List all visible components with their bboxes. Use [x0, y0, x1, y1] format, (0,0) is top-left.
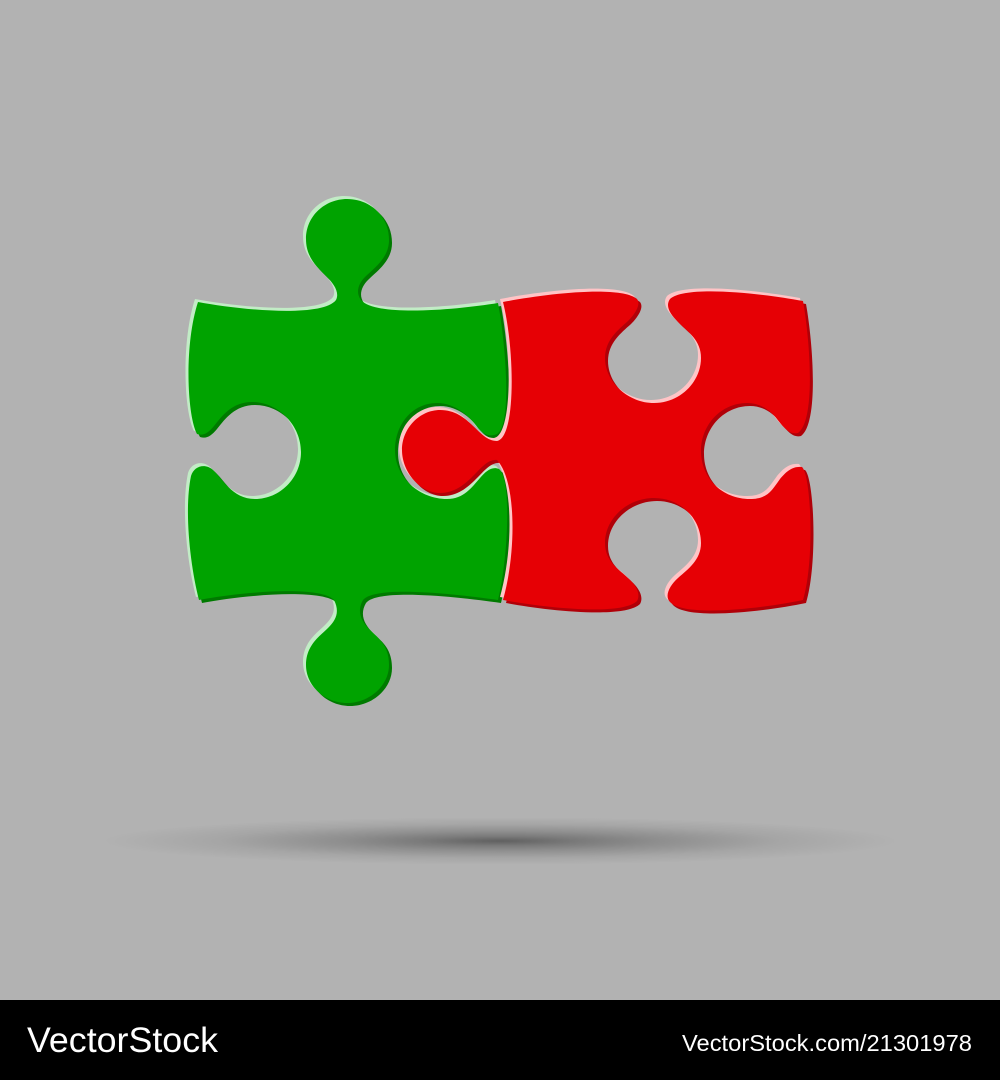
green puzzle piece: [185, 196, 510, 706]
red puzzle piece: [399, 288, 813, 614]
footer image id text: VectorStock.com/21301978: [682, 1030, 972, 1056]
floating shadow: [100, 817, 900, 865]
footer logo text: VectorStock: [27, 1021, 219, 1060]
footer bar: [0, 1000, 1000, 1080]
